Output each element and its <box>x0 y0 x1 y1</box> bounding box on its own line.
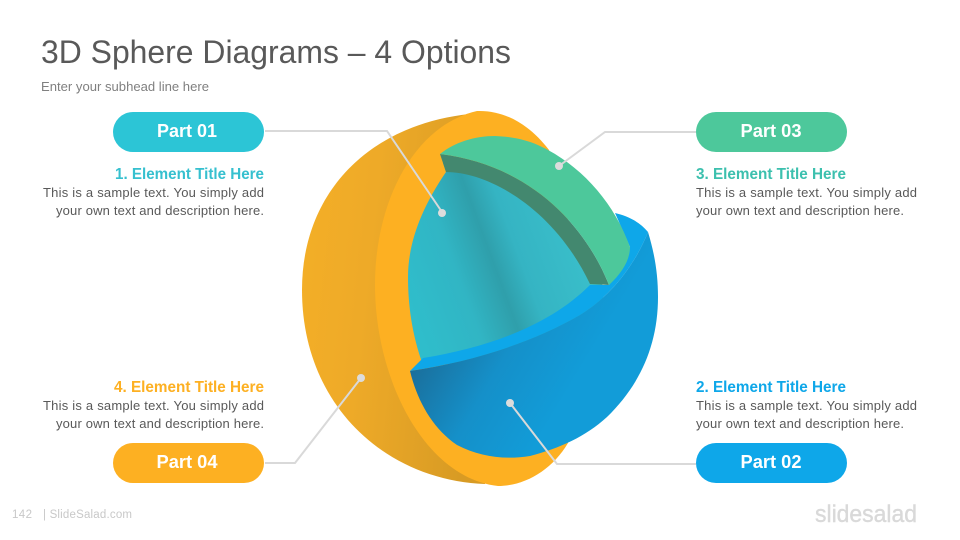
sphere: blue rim <box>410 213 648 371</box>
text block: element 4 <box>43 379 264 431</box>
text block: element 1: your own text and description here. <box>56 203 264 218</box>
sphere: green wedge top <box>440 136 630 285</box>
sphere: front orange ring <box>375 111 590 486</box>
pill: part 04: Part 04 <box>156 452 218 472</box>
connector: part 02 <box>506 399 696 464</box>
text block: element 3: your own text and description here. <box>696 203 904 218</box>
pill: part 01: Part 01 <box>157 121 217 141</box>
sphere: outer back shell <box>302 114 520 484</box>
footer: page number: 142 <box>12 509 32 521</box>
sphere: dark green wedge side <box>440 154 609 285</box>
text block: element 3: 3. Element Title Here <box>696 166 846 183</box>
connector: part 03 <box>555 132 696 170</box>
title: 3D Sphere Diagrams – 4 Options <box>41 34 511 70</box>
text block: element 1 <box>43 166 264 218</box>
pill: part 04 <box>113 443 264 483</box>
connector: part 04 <box>265 374 365 463</box>
pill: part 03: Part 03 <box>740 121 802 141</box>
text block: element 1: This is a sample text. You simply add <box>43 185 264 200</box>
footer: site name: | SlideSalad.com <box>43 509 132 521</box>
text block: element 2: This is a sample text. You simply add <box>696 398 917 413</box>
pill: part 02 <box>696 443 847 483</box>
subhead: Enter your subhead line here <box>41 80 209 94</box>
text block: element 3: This is a sample text. You simply add <box>696 185 917 200</box>
sphere: blue hemisphere <box>410 232 658 458</box>
text block: element 2: 2. Element Title Here <box>696 379 846 396</box>
connector: part 01 <box>265 131 446 217</box>
text block: element 2: your own text and description here. <box>696 416 904 431</box>
3D sphere diagram <box>302 111 658 486</box>
text block: element 4: 4. Element Title Here <box>114 379 264 396</box>
text block: element 1: 1. Element Title Here <box>115 166 264 183</box>
sphere: teal core <box>408 163 605 365</box>
text block: element 4: This is a sample text. You simply add <box>43 398 264 413</box>
text block: element 4: your own text and description here. <box>56 416 264 431</box>
text block: element 3 <box>696 166 917 218</box>
pill: part 01 <box>113 112 264 152</box>
text block: element 2 <box>696 379 917 431</box>
pill: part 03 <box>696 112 847 152</box>
footer: logo wordmark: slidesalad <box>815 501 917 528</box>
pill: part 02: Part 02 <box>740 452 802 472</box>
